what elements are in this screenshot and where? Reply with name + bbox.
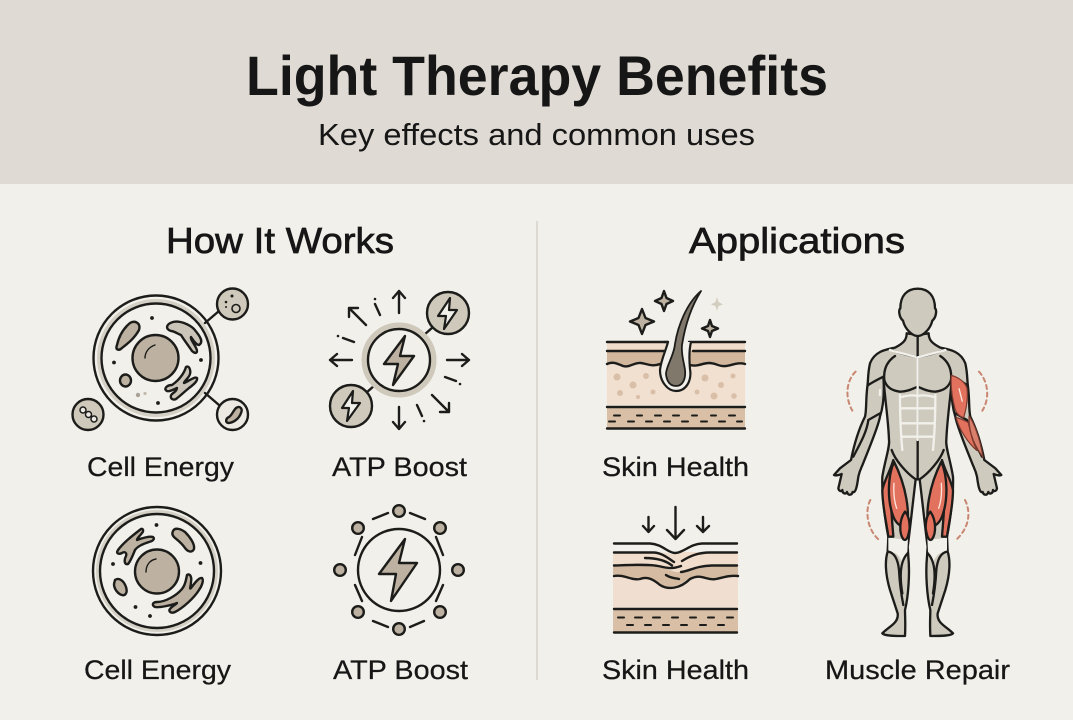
icon: skin with hair follicle: [607, 291, 745, 428]
label: ATP boost bottom: ATP Boost: [333, 655, 469, 685]
label: cell energy top: Cell Energy: [87, 452, 235, 482]
label: muscle repair: Muscle Repair: [825, 655, 1010, 685]
icon: human body with highlighted muscles: [834, 289, 1001, 636]
title: Light Therapy Benefits: [246, 44, 828, 107]
icon: satellite top right: [217, 288, 248, 320]
subtitle: Key effects and common uses: [318, 117, 755, 152]
panel: applications: [602, 220, 1010, 685]
head: [899, 289, 936, 336]
icon: wrinkled skin with arrows: [613, 507, 738, 632]
body: left half: [834, 333, 918, 636]
icon: small bolt bottom left: [330, 385, 372, 427]
icon: ATP radiating: [330, 291, 469, 429]
label: skin health bottom: Skin Health: [602, 655, 749, 685]
body: right half mirror: [918, 333, 1001, 636]
icon: sparkles: [630, 291, 723, 337]
label: cell energy bottom: Cell Energy: [84, 655, 232, 685]
icon: cell plain: [93, 507, 221, 635]
icon: ATP orbit: [334, 505, 464, 635]
heading: how it works: How It Works: [166, 220, 394, 261]
icon: satellite bottom left: [72, 399, 104, 430]
left thigh muscles: [882, 460, 910, 540]
icon: cell with satellites: [72, 288, 248, 430]
label: skin health top: Skin Health: [602, 452, 749, 482]
heading: applications: Applications: [689, 220, 905, 261]
motion dashes: [847, 372, 987, 539]
panel: how it works: [72, 220, 469, 685]
right arm muscles: [951, 375, 983, 457]
icon: satellite bottom right: [217, 399, 248, 430]
label: ATP boost top: ATP Boost: [332, 452, 468, 482]
header band: [0, 0, 1073, 184]
icon: small bolt top right: [427, 292, 469, 334]
